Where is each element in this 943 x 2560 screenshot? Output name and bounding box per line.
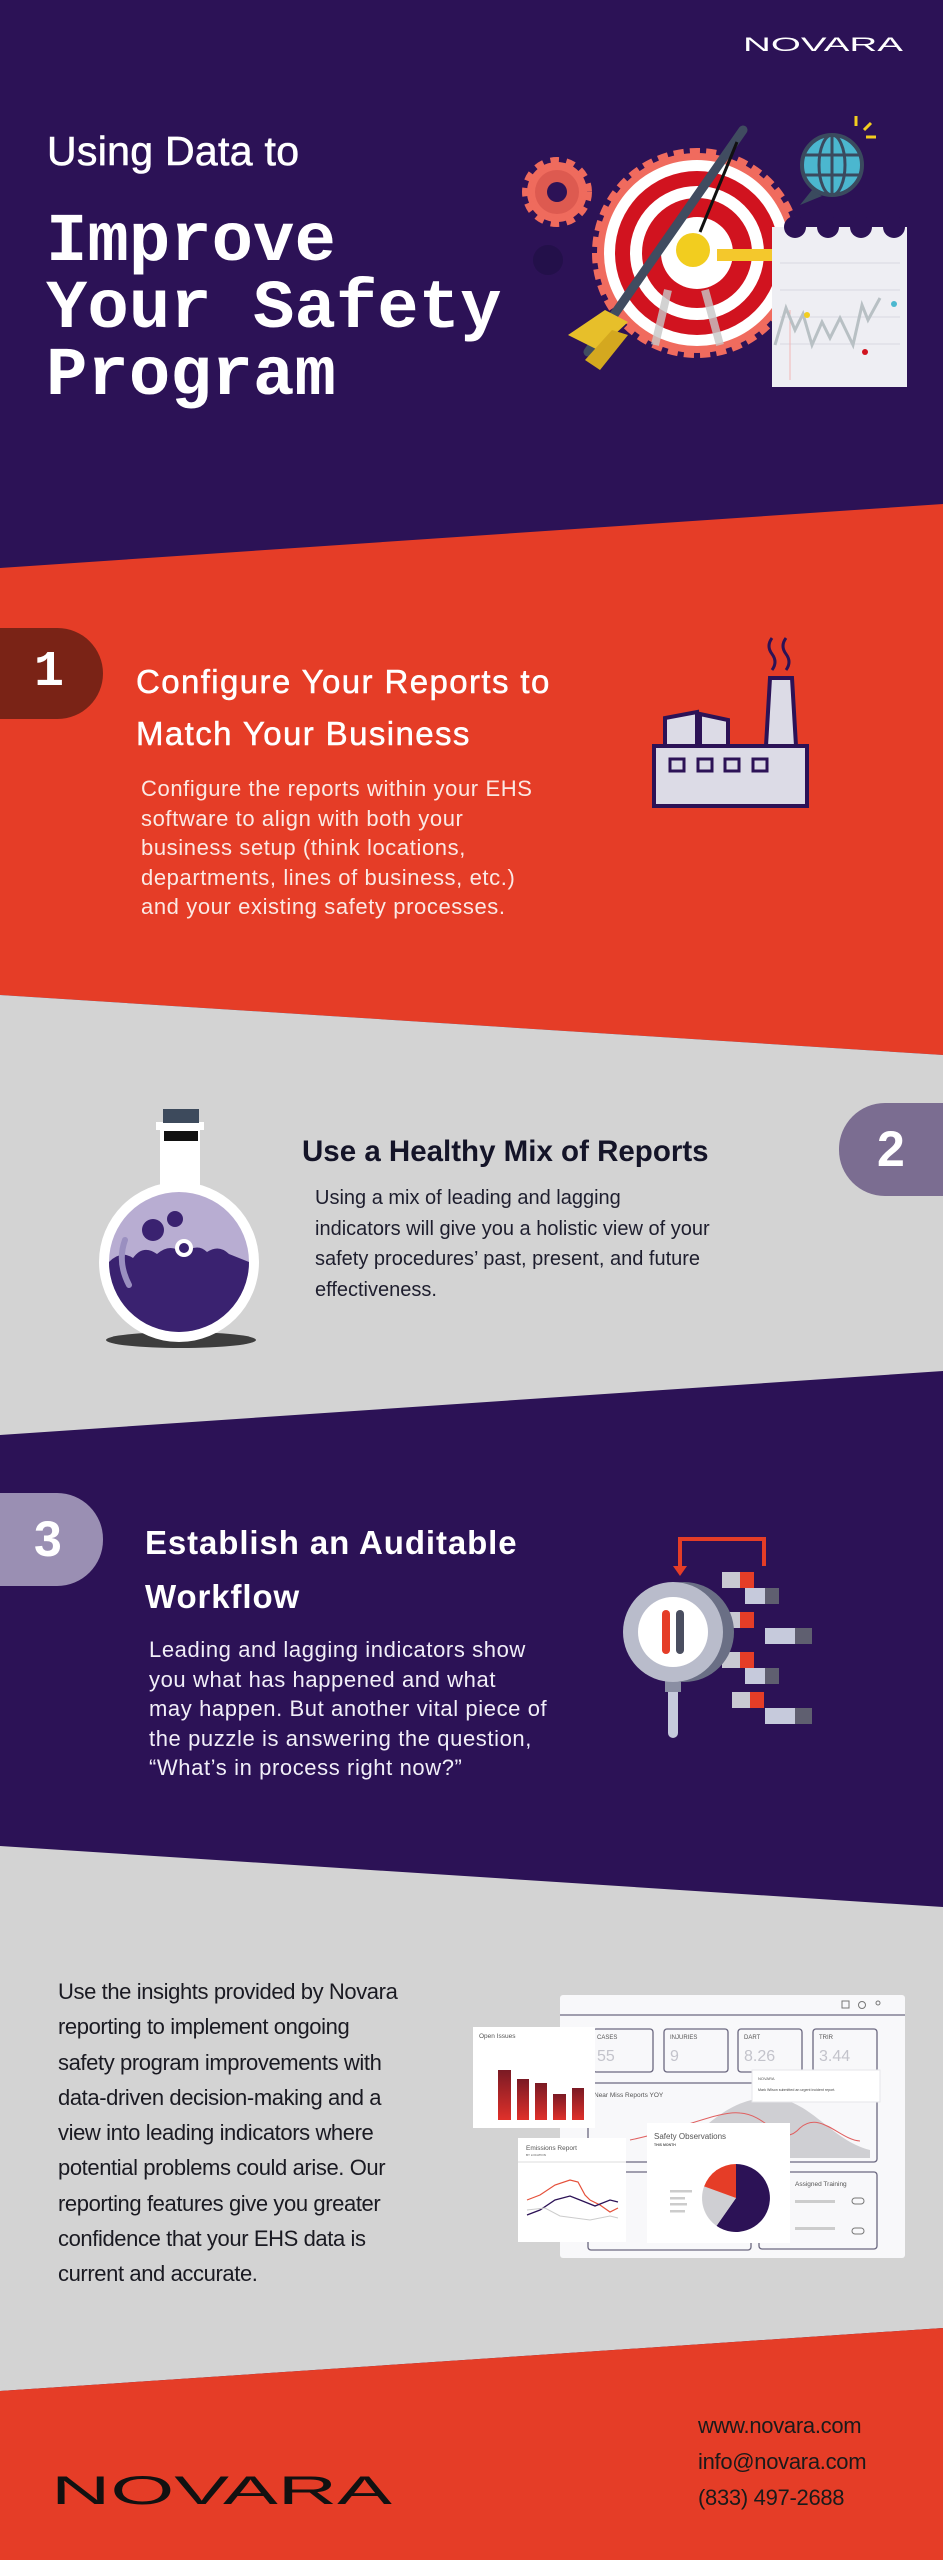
notification	[752, 2070, 880, 2102]
text: closing paragraph: current and accurate.	[58, 2261, 258, 2286]
text: step 2 body: Using a mix of leading and lagging	[315, 1187, 621, 1209]
safety observations card with pie chart: THIS MONTH	[654, 2143, 676, 2147]
text: closing paragraph: potential problems could arise. Our	[58, 2155, 385, 2180]
icon: factory	[652, 637, 809, 808]
emissions report card	[518, 2138, 626, 2242]
badge: number 1: 1	[34, 644, 64, 701]
text: closing paragraph: confidence that your EHS data is	[58, 2226, 366, 2251]
text: step 2 body	[315, 1187, 710, 1300]
main dashboard window	[560, 1995, 905, 2258]
badge: number 2	[839, 1103, 943, 1196]
heading: step 3	[145, 1524, 517, 1615]
text: step 2 body: safety procedures’ past, present, and future	[315, 1248, 700, 1270]
text: step 1 body: software to align with both your	[141, 806, 463, 830]
notification: Mark Wilson submitted an urgent incident report.	[758, 2088, 835, 2092]
emissions report card: Emissions Report	[526, 2145, 577, 2152]
open issues card: Open Issues	[479, 2033, 516, 2040]
main dashboard window: Assigned Training	[795, 2181, 847, 2188]
heading: step 1	[136, 663, 551, 752]
main dashboard window: TRIR	[819, 2035, 834, 2041]
main dashboard window: INJURIES	[670, 2035, 697, 2041]
icon: pencil	[717, 249, 840, 261]
footer contacts: info@novara.com	[698, 2449, 866, 2474]
safety observations card with pie chart: Safety Observations	[654, 2132, 726, 2141]
heading: step 3: Workflow	[145, 1578, 300, 1615]
heading: step 1: Match Your Business	[136, 715, 471, 752]
text: step 1 body: business setup (think locations,	[141, 835, 466, 860]
footer contacts: www.novara.com	[698, 2413, 861, 2438]
panel: step 2	[99, 1103, 943, 1348]
text: closing paragraph: safety program improvements with	[58, 2050, 381, 2075]
heading: step 3: Establish an Auditable	[145, 1524, 517, 1561]
heading: step 1: Configure Your Reports to	[136, 663, 551, 700]
main title	[46, 203, 501, 415]
icon: globe with speech bubble	[800, 116, 876, 205]
text: closing paragraph: data-driven decision-making and a	[58, 2085, 381, 2110]
main title: Program	[46, 337, 336, 415]
header logo: NOVARA	[743, 35, 904, 56]
text: step 1 body: and your existing safety processes.	[141, 894, 506, 919]
notification: NOVARA	[758, 2076, 775, 2081]
text: closing paragraph: view into leading indicators where	[58, 2120, 373, 2145]
text: step 1 body: Configure the reports within your EHS	[141, 776, 532, 801]
footer logo: NOVARA	[51, 2469, 393, 2513]
safety observations card with pie chart	[647, 2123, 790, 2243]
emissions report card: BY LOCATION	[526, 2153, 546, 2157]
badge: number 3: 3	[34, 1511, 62, 1567]
text: step 1 body: departments, lines of business, etc.)	[141, 864, 515, 890]
icon: gear	[527, 162, 587, 222]
badge: number 3	[0, 1493, 103, 1586]
main dashboard window: CASES	[597, 2035, 617, 2041]
dashboard screenshot	[473, 1995, 905, 2258]
main dashboard window: 55	[597, 2048, 615, 2065]
text: step 3 body: may happen. But another vital piece of	[149, 1696, 547, 1721]
icon: dark circle	[533, 245, 563, 275]
panel: step 3	[0, 1493, 812, 1780]
text: closing paragraph: reporting to implement ongoing	[58, 2014, 349, 2039]
main dashboard window: 3.44	[819, 2048, 850, 2065]
icon: arrow	[568, 130, 743, 370]
open issues card	[473, 2027, 595, 2128]
text: closing paragraph: reporting features give you greater	[58, 2191, 380, 2216]
main dashboard window: Near Miss Reports YOY	[594, 2092, 664, 2099]
footer contacts: (833) 497-2688	[698, 2485, 844, 2510]
text: step 3 body: you what has happened and what	[149, 1666, 496, 1692]
main title: Your Safety	[46, 270, 501, 348]
header illustration: target with arrow, gear, globe, notepad	[522, 116, 907, 387]
main dashboard window: 9	[670, 2048, 679, 2065]
icon: notepad chart	[772, 216, 907, 387]
icon: magnifier with workflow blocks	[623, 1537, 812, 1738]
heading: step 2: Use a Healthy Mix of Reports	[302, 1135, 709, 1168]
text: closing paragraph: Use the insights provided by Novara	[58, 1979, 397, 2004]
text: step 2 body: indicators will give you a holistic view of your	[315, 1218, 710, 1240]
icon: flask	[99, 1109, 259, 1348]
text: step 3 body: Leading and lagging indicators show	[149, 1637, 526, 1662]
badge: number 1	[0, 628, 103, 719]
text: closing paragraph	[58, 1979, 398, 2286]
text: step 1 body	[141, 776, 532, 919]
text: step 2 body: effectiveness.	[315, 1278, 437, 1300]
subtitle: Using Data to: Using Data to	[47, 128, 299, 174]
main title: Improve	[46, 203, 336, 281]
text: step 3 body: the puzzle is answering the question,	[149, 1726, 532, 1750]
panel: step 1	[0, 628, 809, 919]
text: step 3 body	[149, 1637, 547, 1780]
badge: number 2: 2	[877, 1121, 905, 1177]
footer contacts	[698, 2413, 866, 2510]
main dashboard window: 8.26	[744, 2048, 775, 2065]
icon: target	[597, 153, 797, 353]
main dashboard window: DART	[744, 2035, 761, 2041]
text: step 3 body: “What’s in process right now?”	[149, 1755, 462, 1780]
